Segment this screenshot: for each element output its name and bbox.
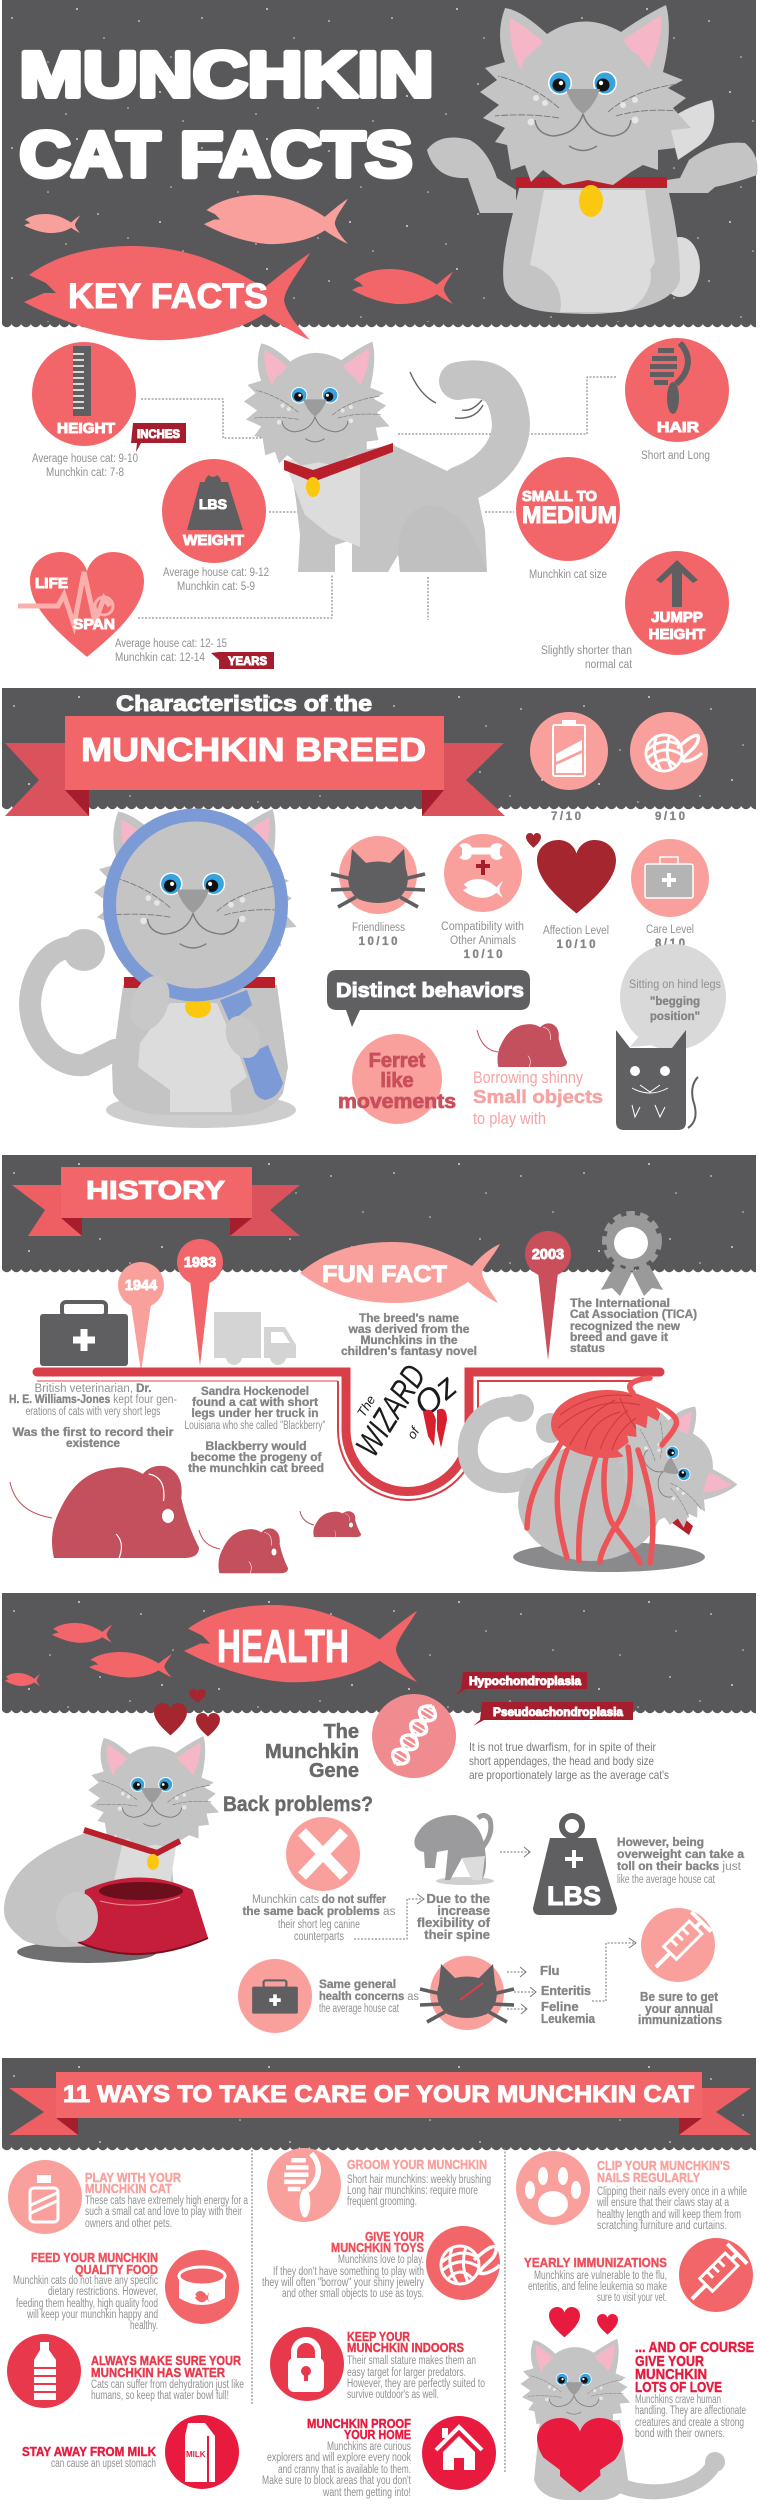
text: 1983 story: Blackberry would [206, 1441, 306, 1453]
callout: begging position: "begging [650, 996, 700, 1008]
behavior: borrowing small objects: to play with [473, 1109, 546, 1128]
text: jump height: normal cat [585, 659, 633, 671]
behavior: borrowing small objects: Small objects [473, 1087, 603, 1107]
tip: lots of love: LOTS OF LOVE [635, 2379, 722, 2396]
stat: life span heart [18, 552, 144, 657]
decorative pink and red fish [24, 195, 453, 304]
text: illnesses: Feline [541, 1999, 579, 2014]
title [20, 38, 434, 190]
text: height stats [32, 453, 138, 479]
tip: groom [267, 2148, 491, 2222]
tip: indoors: easy target for larger predators. [347, 2367, 466, 2379]
tip: milk: can cause an upset stomach [51, 2458, 156, 2470]
banner: health fish [184, 1605, 417, 1682]
tip: groom: Long hair munchkins: require more [347, 2185, 478, 2197]
text: immunizations [638, 1990, 722, 2027]
text: 1983 story [184, 1386, 326, 1475]
icon: x circle [286, 1817, 360, 1891]
text: dwarfism [469, 1740, 669, 1782]
stat: life span heart: LIFE [35, 575, 68, 592]
callout: pseudoachondroplasia [473, 1702, 633, 1726]
tip: food [13, 2250, 239, 2332]
text: back problems: counterparts [294, 1931, 344, 1943]
tip: toys: If they don't have something to play with [273, 2266, 424, 2278]
text: illnesses: Enteritis [541, 1983, 591, 1998]
illustration: cat hugging heart [520, 2307, 725, 2500]
tip: food: Munchkin cats do not have any specific [13, 2275, 158, 2287]
text: size: Munchkin cat size [529, 569, 607, 581]
illustration: header cat [427, 5, 758, 314]
illustration: key facts cat [244, 341, 511, 572]
text: 1983 story: found a cat with short [192, 1397, 318, 1409]
text: dwarfism: are proportionately large as the average cat's [469, 1768, 669, 1782]
tip: play: These cats have extremely high energy for a [85, 2195, 248, 2207]
column dividers [252, 2148, 505, 2472]
text: dwarfism: It is not true dwarfism, for in spite of their [469, 1740, 656, 1754]
stat: hair [625, 338, 729, 442]
icon: medical case circle [238, 1959, 312, 2033]
panel: header background [2, 0, 756, 328]
banner: fun fact fish [300, 1242, 500, 1303]
text: overweight: However, being [617, 1837, 704, 1849]
logo: the wizard of oz: WIZARD [349, 1358, 434, 1463]
text: 1944 story: existence [66, 1438, 120, 1450]
callout: years [211, 652, 274, 669]
tip: groom: Short hair munchkins: weekly brushing [347, 2174, 491, 2186]
tip: toys: and other small objects to use as toys. [282, 2288, 424, 2300]
rating: 9/10: 9/10 [655, 811, 685, 823]
tip: milk: STAY AWAY FROM MILK [22, 2444, 157, 2459]
stat: weight: WEIGHT [183, 532, 244, 549]
text: back problems: Munchkin cats do not suffer [252, 1894, 386, 1906]
behavior: borrowing small objects [473, 1068, 603, 1128]
title: CAT FACTS [20, 118, 412, 190]
banner: health fish: HEALTH [217, 1620, 349, 1672]
text: height stats: Munchkin cat: 7-8 [46, 467, 124, 479]
banner: history ribbon: HISTORY [86, 1175, 225, 1205]
text: TICA [570, 1298, 697, 1355]
heading: back problems: Back problems? [223, 1793, 373, 1816]
tip: immunizations [524, 2238, 753, 2312]
behavior: ferret like movements: like [380, 1070, 414, 1092]
stat: small to medium: MEDIUM [522, 502, 617, 529]
banner: history ribbon [12, 1167, 300, 1236]
text: weight stats: Munchkin cat: 5-9 [177, 581, 255, 593]
stat: weight [162, 459, 266, 563]
callout: begging position: position" [650, 1011, 700, 1023]
text: overweight: toll on their backs just [617, 1861, 742, 1873]
panel: characteristics header [2, 688, 756, 810]
stat: care level [631, 839, 709, 950]
stat: height: HEIGHT [57, 420, 115, 437]
tip: indoors: KEEP YOUR [347, 2329, 411, 2344]
tip: home [262, 2416, 496, 2499]
text: fun fact: Munchkins in the [360, 1335, 458, 1347]
text: illnesses: Flu [540, 1963, 560, 1978]
icon: syringe circle [641, 1908, 715, 1982]
arrows: illnesses [507, 1967, 536, 2014]
stat: compatibility: 10/10 [464, 949, 502, 961]
panel: history header [2, 1155, 756, 1273]
tip: water: ALWAYS MAKE SURE YOUR [91, 2353, 242, 2368]
text: 1944 story: H. E. Williams-Jones kept four gen- [9, 1394, 177, 1406]
tip: home: explorers and will explore every nook [267, 2452, 411, 2464]
tip: indoors: However, they are perfectly suited to [347, 2378, 485, 2390]
stat: life span heart: SPAN [73, 616, 115, 633]
stat: affection: Affection Level [543, 925, 609, 937]
tip: nails [516, 2151, 747, 2232]
text: fun fact [341, 1313, 477, 1358]
tip: toys: GIVE YOUR [365, 2229, 424, 2244]
tip: home: want them getting into! [322, 2487, 411, 2499]
text: overweight: like the average house cat [617, 1874, 716, 1886]
tip: food: will keep your munchkin happy and [26, 2309, 158, 2321]
callout: hypochondroplasia [456, 1672, 587, 1695]
text: jump height [541, 645, 633, 671]
logo: the wizard of oz: Oz [407, 1367, 464, 1424]
arrow: illnesses to immunizations [592, 1938, 636, 2001]
tip: home: Make sure to block areas that you don't [262, 2475, 412, 2487]
tip: water: Cats can suffer from dehydration just like [91, 2379, 244, 2391]
stat: compatibility: Other Animals [450, 935, 516, 947]
tip: milk: MILK [186, 2450, 206, 2459]
icon: lbs weight: LBS [547, 1881, 601, 1911]
text: flexibility: flexibility of [417, 1915, 491, 1930]
icon: truck [214, 1312, 296, 1365]
text: TICA: breed and gave it [570, 1332, 668, 1344]
heading: the munchkin gene: Munchkin [265, 1741, 359, 1763]
arrow: back problems to spine [354, 1894, 424, 1939]
heading: the munchkin gene: Gene [309, 1760, 359, 1782]
tip: nails: CLIP YOUR MUNCHKIN'S [597, 2158, 730, 2173]
timeline pin: 1983: 1983 [184, 1255, 216, 1271]
tip: home: Munchkins are curious [327, 2441, 411, 2453]
text: flexibility [417, 1891, 491, 1942]
text: back problems [242, 1894, 396, 1943]
tip: toys: MUNCHKIN TOYS [331, 2240, 424, 2255]
tip: food: FEED YOUR MUNCHKIN [31, 2250, 158, 2265]
stat: care level: Care Level [646, 924, 694, 936]
text: illnesses [540, 1963, 596, 2026]
text: overweight: overweight can take a [617, 1849, 745, 1861]
stat: friendliness: 10/10 [358, 936, 398, 948]
decorative fish [5, 1623, 172, 1686]
banner: key facts fish: KEY FACTS [68, 277, 268, 316]
text: dwarfism: short appendages, the head and body size [469, 1754, 654, 1768]
tip: home: and cranny that is available to them. [278, 2464, 411, 2476]
text: TICA: status [570, 1343, 605, 1355]
tip: lots of love: Munchkins crave human [635, 2394, 721, 2406]
stat: hair: HAIR [657, 419, 699, 436]
icon: large mouse [10, 1466, 199, 1558]
icon: begging cat [616, 1030, 698, 1130]
text: TICA: Cat Association (TICA) [570, 1309, 697, 1321]
banner: 11 ways ribbon [9, 2072, 751, 2135]
stat: affection [526, 833, 616, 951]
tip: home: YOUR HOME [344, 2427, 411, 2442]
text: hair: Short and Long [641, 450, 710, 462]
tip: food: feeding them healthy, high quality food [16, 2298, 158, 2310]
tip: food: QUALITY FOOD [75, 2262, 158, 2277]
timeline pin: 2003 [525, 1231, 571, 1360]
tip: play: such a small cat and love to play with their [85, 2206, 242, 2218]
tip: indoors [270, 2327, 485, 2401]
tip: nails: scratching furniture and curtains. [597, 2220, 727, 2232]
text: 1944 story: erations of cats with very short legs [26, 1406, 161, 1418]
text: general health: the average house cat [319, 2003, 400, 2015]
text: back problems: the same back problems as [242, 1906, 396, 1918]
text: 1983 story: Sandra Hockenodel [201, 1386, 309, 1398]
text: immunizations: immunizations [638, 2013, 722, 2027]
heading: the munchkin gene [265, 1721, 359, 1782]
text: illnesses: Leukemia [541, 2011, 596, 2026]
callout: begging position [620, 944, 726, 1050]
text: 1944 story [9, 1383, 177, 1450]
tip: indoors: survive outdoor's as well. [347, 2389, 439, 2401]
tip: water [7, 2334, 244, 2408]
callout: hypochondroplasia: Hypochondroplasia [469, 1674, 581, 1688]
tip: indoors: MUNCHKIN INDOORS [347, 2340, 464, 2355]
tip: lots of love: GIVE YOUR [635, 2353, 704, 2370]
stat: weight: LBS [199, 496, 227, 512]
icon: lbs weight [533, 1816, 617, 1915]
text: general health: Same general [319, 1979, 396, 1991]
connector lines [138, 377, 617, 620]
icon: hearts [154, 1689, 220, 1737]
callout: years: YEARS [228, 654, 267, 668]
illustration: cat with magnifying glass [30, 809, 297, 1128]
text: immunizations: your annual [645, 2002, 713, 2016]
icon: award rosette [601, 1215, 663, 1296]
tip: food: dietary restrictions. However, [48, 2286, 158, 2298]
stat: friendliness [331, 836, 425, 948]
stat: jump height [625, 551, 729, 655]
tip: home: MUNCHKIN PROOF [307, 2416, 411, 2431]
banner: munchkin breed ribbon [5, 716, 505, 816]
banner: key facts fish [24, 246, 310, 340]
timeline pin: 1983 [177, 1239, 223, 1366]
text: life span stats [115, 638, 227, 664]
callout: inches [131, 423, 186, 452]
behavior: borrowing small objects: Borrowing shinny [473, 1068, 583, 1087]
logo: the wizard of oz: of [404, 1423, 423, 1442]
stat: jump height: JUMPP [651, 609, 703, 626]
text: immunizations: Be sure to get [640, 1990, 719, 2004]
text: 1983 story: become the progeny of [190, 1452, 322, 1464]
text: flexibility: increase [437, 1903, 490, 1918]
title: MUNCHKIN [20, 38, 434, 110]
icon: energy battery [530, 712, 608, 790]
text: life span stats: Average house cat: 12- 15 [115, 638, 227, 650]
tip: water: MUNCHKIN HAS WATER [91, 2365, 226, 2380]
behavior: ferret like movements: movements [338, 1091, 456, 1113]
icon: mouse [477, 1023, 567, 1067]
callout: distinct behaviors: Distinct behaviors [336, 980, 524, 1002]
tip: milk [22, 2415, 239, 2489]
tip: indoors: Their small stature makes them an [347, 2355, 476, 2367]
stat: small to medium: SMALL TO [522, 488, 597, 505]
text: 1944 story: Was the first to record their [12, 1427, 174, 1439]
tip: lots of love: bond with their owners. [635, 2428, 725, 2440]
icon: stretching cat [414, 1815, 494, 1885]
stat: jump height: HEIGHT [649, 626, 705, 643]
timeline pin: 2003: 2003 [532, 1247, 564, 1263]
tip: lots of love [635, 2339, 754, 2440]
tip: groom: GROOM YOUR MUNCHKIN [347, 2157, 487, 2172]
stat: small to medium [516, 457, 620, 561]
text: 1983 story: the munchkin cat breed [188, 1463, 324, 1475]
callout: distinct behaviors [327, 970, 530, 1027]
illustration: cat with food bowl [4, 1736, 219, 1963]
tip: toys: they will often "borrow" your shiny jewelry [262, 2277, 424, 2289]
text: jump height: Slightly shorter than [541, 645, 632, 657]
tip: food: healthy. [130, 2320, 158, 2332]
tip: toys [262, 2226, 500, 2300]
tip: immunizations: Munchkins are vulnerable to the flu, [534, 2270, 667, 2282]
tip: immunizations: YEARLY IMMUNIZATIONS [524, 2255, 667, 2270]
text: fun fact: children's fantasy novel [341, 1346, 477, 1358]
text: general health [319, 1979, 419, 2015]
rating: 7/10: 7/10 [551, 811, 581, 823]
banner: munchkin breed ribbon: MUNCHKIN BREED [81, 731, 426, 768]
arrow: flexibility to weight [500, 1847, 530, 1857]
stat: affection: 10/10 [556, 939, 596, 951]
text: general health: health concerns as [319, 1991, 419, 2003]
callout: pseudoachondroplasia: Pseudoachondroplasia [493, 1705, 623, 1719]
text: flexibility: their spine [424, 1927, 490, 1942]
text: height stats: Average house cat: 9-10 [32, 453, 138, 465]
tip: immunizations: enteritis, and feline leukemia so make [528, 2281, 667, 2293]
text: flexibility: Due to the [426, 1891, 490, 1906]
text: fun fact: The breed's name [359, 1313, 459, 1325]
text: weight stats [163, 567, 269, 593]
icon: dna circle [372, 1694, 456, 1778]
behavior: ferret like movements [338, 1034, 456, 1124]
logo: the wizard of oz: The [354, 1393, 378, 1420]
icon: small mouse [300, 1511, 361, 1537]
callout: begging position: Sitting on hind legs [629, 979, 721, 991]
stat: height [32, 342, 136, 446]
text: weight stats: Average house cat: 9-12 [163, 567, 269, 579]
stat: compatibility: Compatibility with [441, 921, 524, 933]
tip: play: owners and other pets. [85, 2218, 172, 2230]
icon: medium mouse [199, 1528, 288, 1573]
banner: 11 ways ribbon: 11 WAYS TO TAKE CARE OF YOUR MUNCHKIN CAT [63, 2081, 694, 2108]
illustration: cat with yarn [468, 1378, 744, 1572]
text: 1944 story: British veterinarian, Dr. [35, 1383, 151, 1395]
tip: lots of love: MUNCHKIN [635, 2366, 707, 2383]
tip: play: PLAY WITH YOUR [85, 2170, 182, 2185]
callout: inches: INCHES [137, 427, 180, 441]
behavior: ferret like movements: Ferret [369, 1050, 426, 1072]
icon: medical case [40, 1302, 128, 1366]
panel: care header [2, 2058, 756, 2151]
text: TICA: recognized the new [570, 1321, 680, 1333]
stat: care level: 8/10 [655, 938, 685, 950]
timeline pin: 1944: 1944 [125, 1278, 157, 1294]
timeline pin: 1944 [118, 1262, 164, 1372]
tip: water: humans, so keep that water bowl full! [91, 2390, 229, 2402]
tip: play: MUNCHKIN CAT [85, 2181, 172, 2196]
text: fun fact: was derived from the [347, 1324, 470, 1336]
text: overweight [617, 1837, 745, 1886]
timeline band [37, 1372, 660, 1500]
tip: toys: Munchkins love to play. [338, 2254, 424, 2266]
banner: fun fact fish: FUN FACT [322, 1261, 447, 1288]
heading: characteristics of the: Characteristics of the [116, 691, 372, 716]
tip: nails: NAILS REGULARLY [597, 2170, 700, 2185]
icon: playfulness yarn [630, 712, 708, 790]
heading: the munchkin gene: The [323, 1721, 359, 1743]
panel: health header [2, 1593, 756, 1714]
tip: immunizations: sure to visit your vet. [597, 2292, 667, 2304]
stat: compatibility [441, 834, 524, 961]
stat: friendliness: Friendliness [352, 922, 405, 934]
icon: sick cat circle [420, 1956, 514, 2030]
text: 1983 story: legs under her truck in [192, 1408, 318, 1420]
text: 1983 story: Louisiana who she called "Blackberry" [184, 1420, 326, 1432]
text: back problems: their short leg canine [278, 1919, 360, 1931]
text: life span stats: Munchkin cat: 12-14 [115, 652, 206, 664]
text: TICA: The International [570, 1298, 670, 1310]
tip: play [8, 2160, 248, 2234]
tip: groom: frequent grooming. [347, 2196, 417, 2208]
